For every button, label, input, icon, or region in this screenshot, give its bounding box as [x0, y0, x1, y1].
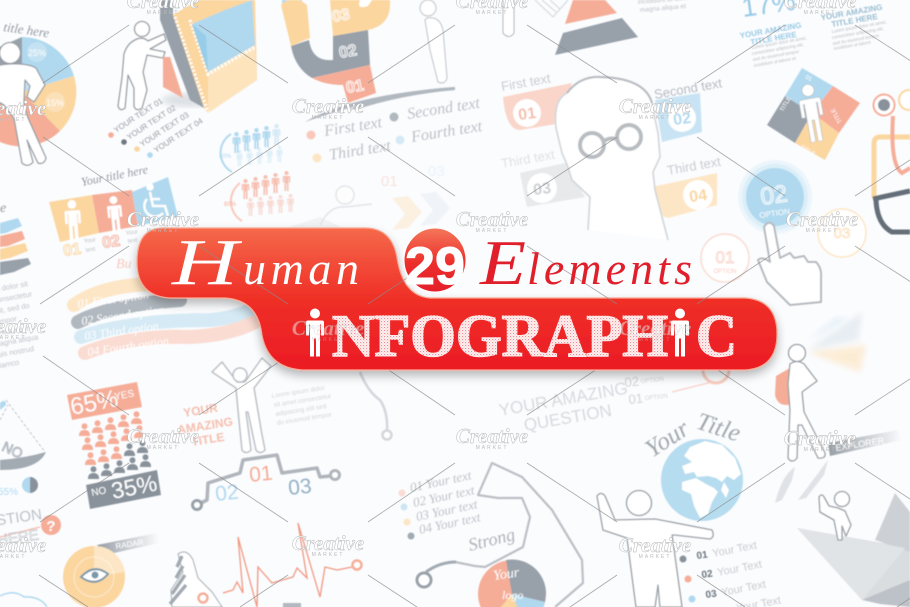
balance NO, 55% and question mark, left edge: [0, 400, 61, 549]
Creative Market watermarks: MARKET: [639, 554, 671, 560]
options 02 and 01 with ring: OPTION: [645, 394, 668, 402]
Creative Market watermarks: MARKET: [476, 10, 508, 16]
your amazing title, salmon, with lorem: sit amet consectetur: [273, 393, 333, 409]
17% your amazing title here: [739, 0, 807, 68]
options 02 and 01 with ring: OPTION: [641, 377, 664, 385]
balance NO, 55% and question mark, left edge: ?: [46, 518, 56, 535]
Creative Market watermarks: Creative: [786, 207, 858, 231]
numbered tabs: Third text: [500, 147, 556, 171]
Creative Market watermarks: Creative: [127, 424, 199, 448]
second your amazing title here block: [820, 3, 887, 51]
your amazing title, salmon, with lorem: Lorem ipsum dolor: [271, 385, 326, 400]
paper boat with person: [797, 492, 910, 607]
Creative Market watermarks: Creative: [292, 94, 364, 118]
second your amazing title here block: TITLE HERE: [831, 12, 879, 29]
curved ribbons: four options: 04 Fourth option: [86, 334, 170, 359]
Creative Market watermarks: MARKET: [806, 228, 838, 234]
people chart: male and female percentages: 60%: [224, 202, 237, 208]
Creative Market watermarks: MARKET: [312, 337, 344, 343]
17% your amazing title here: consectetur adipiscing elit,: [751, 42, 804, 56]
Creative Market watermarks: MARKET: [804, 10, 836, 16]
curved ribbons: four options: 01 First option: [76, 287, 150, 311]
Creative Market watermarks: MARKET: [804, 447, 836, 453]
Creative Market watermarks: Creative: [456, 207, 528, 231]
radar with eye: RADAR: [115, 538, 144, 551]
Creative Market watermarks: Creative: [619, 316, 691, 340]
pyramid and fan, top: magna aliqua et: [640, 3, 686, 14]
connected icons and glasses, right edge: [873, 90, 910, 232]
numbered tabs: 01: [517, 105, 537, 124]
your amazing title, salmon, with lorem: do eiusmod tempor: [276, 411, 333, 427]
rotated legend your text 01-04: YOUR TEXT 02: [125, 103, 178, 142]
65% yes / 35% no people panel: 35%: [109, 470, 159, 504]
your amazing title, salmon, with lorem: adipiscing elit sed: [275, 403, 327, 418]
your amazing title, salmon, with lorem: YOUR: [182, 401, 219, 420]
numbered tabs: Third text: [666, 154, 722, 178]
your title and globe: Your: [641, 415, 694, 463]
options list 01-04 script: [398, 467, 482, 540]
curved ribbons: four options: 02 Second option: [80, 303, 165, 328]
option 01 circle and ring: 01: [716, 248, 734, 267]
second your amazing title here block: incididunt ut labore: [833, 39, 872, 51]
second your amazing title here block: consectetur adipiscing elit,: [831, 26, 884, 40]
Creative Market watermarks: MARKET: [639, 337, 671, 343]
four-part diamond with person: 01: [804, 75, 813, 83]
numbered your text list: Your Text: [716, 559, 763, 579]
pie chart with person, top left: title here: [3, 19, 51, 40]
title word: Elements: E: [479, 227, 526, 298]
Creative Market watermarks: MARKET: [147, 445, 179, 451]
banner shape: [137, 228, 777, 370]
snake numbered path 01 02 03: [281, 0, 390, 103]
options list 01-04 script: 04 Your text: [418, 509, 482, 537]
65% yes / 35% no people panel: NO: [90, 485, 108, 499]
Creative Market watermarks: Creative: [619, 533, 691, 557]
options list 01-04 script: 03 Your text: [415, 496, 479, 524]
numbered your text list: Your Text: [720, 579, 767, 599]
explorer: person with backpack and light beam: [775, 312, 902, 503]
your amazing question: QUESTION: [522, 401, 613, 435]
options 02 and 01 with ring: 02: [624, 374, 640, 390]
65% yes / 35% no people panel: [67, 382, 161, 509]
options list 01-04 script: 01 Your text: [409, 467, 473, 495]
option 01 circle and ring: 03: [834, 225, 850, 242]
Creative Market watermarks: Creative: [292, 531, 364, 555]
pie chart with person, top left: 25%: [28, 48, 46, 58]
strong arm with logo pie: Your: [492, 565, 521, 584]
title word: INFOGRAPHIC with person icons: C: [696, 303, 737, 369]
strong arm with logo pie: [417, 463, 583, 607]
rotated legend your text 01-04: YOUR TEXT 03: [138, 110, 191, 149]
four-part diamond with person: TITLE: [799, 145, 816, 158]
17% your amazing title here: sed do eiusmod tempor: [752, 49, 800, 62]
option 01 circle and ring: [701, 209, 866, 282]
strong arm with logo pie: Strong: [466, 524, 517, 555]
Creative Market watermarks: Creative: [784, 426, 856, 450]
Creative Market watermarks: MARKET: [312, 115, 344, 121]
curved ribbons: four options: Bu: [116, 257, 132, 272]
Creative Market watermarks: Creative: [292, 316, 364, 340]
second your amazing title here block: Lorem ipsum dolor sit amet,: [831, 19, 887, 34]
17% your amazing title here: incididunt ut labore et: [753, 56, 797, 68]
four-part diamond with person: [767, 68, 860, 160]
your title and globe: Title: [693, 408, 744, 447]
badge: 29: 29: [405, 237, 465, 296]
pie chart with person, top left: 15%: [46, 98, 64, 108]
17% your amazing title here: TITLE HERE: [750, 30, 798, 47]
Creative Market watermarks: Creative: [619, 94, 691, 118]
panel: title with man, woman, wheelchair: Your: [125, 229, 138, 237]
Creative Market watermarks: MARKET: [147, 228, 179, 234]
option 02 button with rings: [738, 160, 812, 234]
thin outline person, top: [420, 0, 447, 83]
four-part diamond with person: TITLE: [780, 96, 793, 113]
numbered your text list: 02: [701, 568, 714, 581]
people chart: male and female percentages: 40%: [219, 154, 232, 160]
numbered tabs: 03: [532, 180, 552, 199]
Creative Market watermarks: MARKET: [147, 10, 179, 16]
option 01 circle and ring: OPTION: [713, 269, 737, 275]
options 02 and 01 with ring: 01: [628, 391, 644, 407]
options 02 and 01 with ring: [624, 357, 729, 407]
title word: Human: [171, 226, 359, 299]
panel: title with man, woman, wheelchair: [49, 162, 178, 260]
rotated legend your text 01-04: YOUR TEXT 04: [152, 116, 205, 155]
title word: Elements: [479, 227, 692, 298]
watermark lines over banner: [40, 246, 910, 304]
numbered your text list: Your Text: [711, 540, 758, 560]
option 02 button with rings: OPTION: [759, 207, 791, 220]
17% your amazing title here: YOUR AMAZING: [739, 21, 802, 40]
rotated legend your text 01-04: YOUR TEXT 01: [112, 96, 165, 135]
stepped line with 01 02 03: 02: [214, 481, 240, 506]
numbered your text list: [680, 540, 782, 607]
title word: Elements: lements: [527, 243, 692, 294]
snake numbered path 01 02 03: 03: [331, 6, 351, 26]
big person with outstretched arms: [597, 490, 713, 607]
65% yes / 35% no people panel: YES: [113, 388, 136, 403]
swoosh with four script labels: Fourth text: [409, 118, 484, 146]
numbered your text list: 01: [696, 549, 709, 562]
numbered tabs: First text: [500, 70, 552, 94]
cloud outline, bottom left: [0, 593, 47, 607]
rotated legend your text 01-04: [108, 96, 205, 158]
curved ribbons: four options: 03 Third option: [83, 319, 160, 343]
stepped line with 01 02 03: [192, 455, 340, 510]
Creative Market watermarks: Creative: [127, 207, 199, 231]
title word: INFOGRAPHIC with person icons: NFOGRAPH: [332, 303, 668, 369]
numbered tabs: [500, 70, 724, 218]
pointing hand: [758, 223, 821, 305]
pale person and chevrons behind banner: 03: [428, 163, 445, 180]
numbered tabs: Second text: [653, 75, 724, 102]
second your amazing title here block: sed do eiusmod tempor: [832, 33, 880, 46]
numbered your text list: 03: [705, 588, 718, 601]
panel: title with man, woman, wheelchair: text: [127, 238, 138, 245]
people chart: male and female percentages: [219, 124, 294, 221]
Creative Market watermarks: Creative: [456, 424, 528, 448]
stepped line with 01 02 03: 03: [287, 475, 313, 500]
swoosh with four script labels: Third text: [328, 137, 392, 164]
second your amazing title here block: YOUR AMAZING: [820, 3, 883, 22]
numbered tabs: 02: [672, 110, 692, 129]
balance NO, 55% and question mark, left edge: NO: [0, 438, 26, 462]
four-part diamond with person: TITLE: [830, 107, 844, 124]
swoosh with four script labels: First text: [322, 114, 384, 140]
your amazing title, salmon, with lorem: [176, 385, 333, 449]
panel: title with man, woman, wheelchair: 01: [62, 241, 82, 260]
circuit line below banner: [360, 372, 392, 440]
swoosh with four script labels: [305, 87, 484, 164]
title word: Human: uman: [243, 243, 359, 294]
ECG heart line with torso: [170, 523, 362, 607]
person pushing box: [118, 22, 166, 110]
swoosh with four script labels: Second text: [406, 95, 482, 123]
snake numbered path 01 02 03: 02: [338, 42, 358, 62]
strong arm with logo pie: logo: [502, 588, 523, 602]
Creative Market watermarks: MARKET: [312, 552, 344, 558]
radar with eye: [63, 533, 159, 607]
raised-arms person on pedestal: [212, 358, 271, 452]
main banner: [40, 226, 910, 370]
head silhouette with glasses: [555, 77, 668, 240]
panel: title with man, woman, wheelchair: 02: [101, 233, 121, 252]
pale person and chevrons behind banner: [283, 163, 450, 230]
your amazing title, salmon, with lorem: TITLE: [190, 430, 225, 449]
ribbon arrows and lorem text, left edge: [0, 201, 40, 371]
ribbon arrows and lorem text, left edge: e: [0, 201, 6, 216]
17% your amazing title here: Lorem ipsum dolor sit amet,: [751, 35, 807, 50]
your amazing title, salmon, with lorem: AMAZING: [176, 414, 234, 437]
your amazing question: YOUR AMAZING: [497, 379, 629, 420]
snake numbered path 01 02 03: 01: [345, 77, 365, 97]
title word: Human: H: [171, 226, 243, 299]
numbered tabs: 04: [688, 187, 708, 206]
panel: title with man, woman, wheelchair: text: [85, 247, 96, 254]
65% yes / 35% no people panel: 65%: [68, 385, 120, 421]
options list 01-04 script: 02 Your text: [412, 482, 476, 510]
pie chart with person, top left: [0, 19, 76, 165]
panel: title with man, woman, wheelchair: Your: [83, 237, 96, 245]
curved ribbons: four options: [74, 257, 255, 359]
pale person and chevrons behind banner: 01: [381, 173, 398, 190]
option 02 button with rings: 02: [759, 180, 789, 211]
explorer: person with backpack and light beam: EXPLORER: [835, 435, 885, 453]
Creative Market watermarks: MARKET: [476, 445, 508, 451]
stepped line with 01 02 03: 01: [248, 462, 274, 487]
Creative Market watermarks: MARKET: [476, 228, 508, 234]
Creative Market watermarks: MARKET: [639, 115, 671, 121]
your title and globe: [641, 408, 744, 521]
isometric box: [160, 0, 257, 113]
panel: title with man, woman, wheelchair: Your title here: [80, 162, 150, 189]
pyramid and fan, top: [503, 0, 693, 55]
